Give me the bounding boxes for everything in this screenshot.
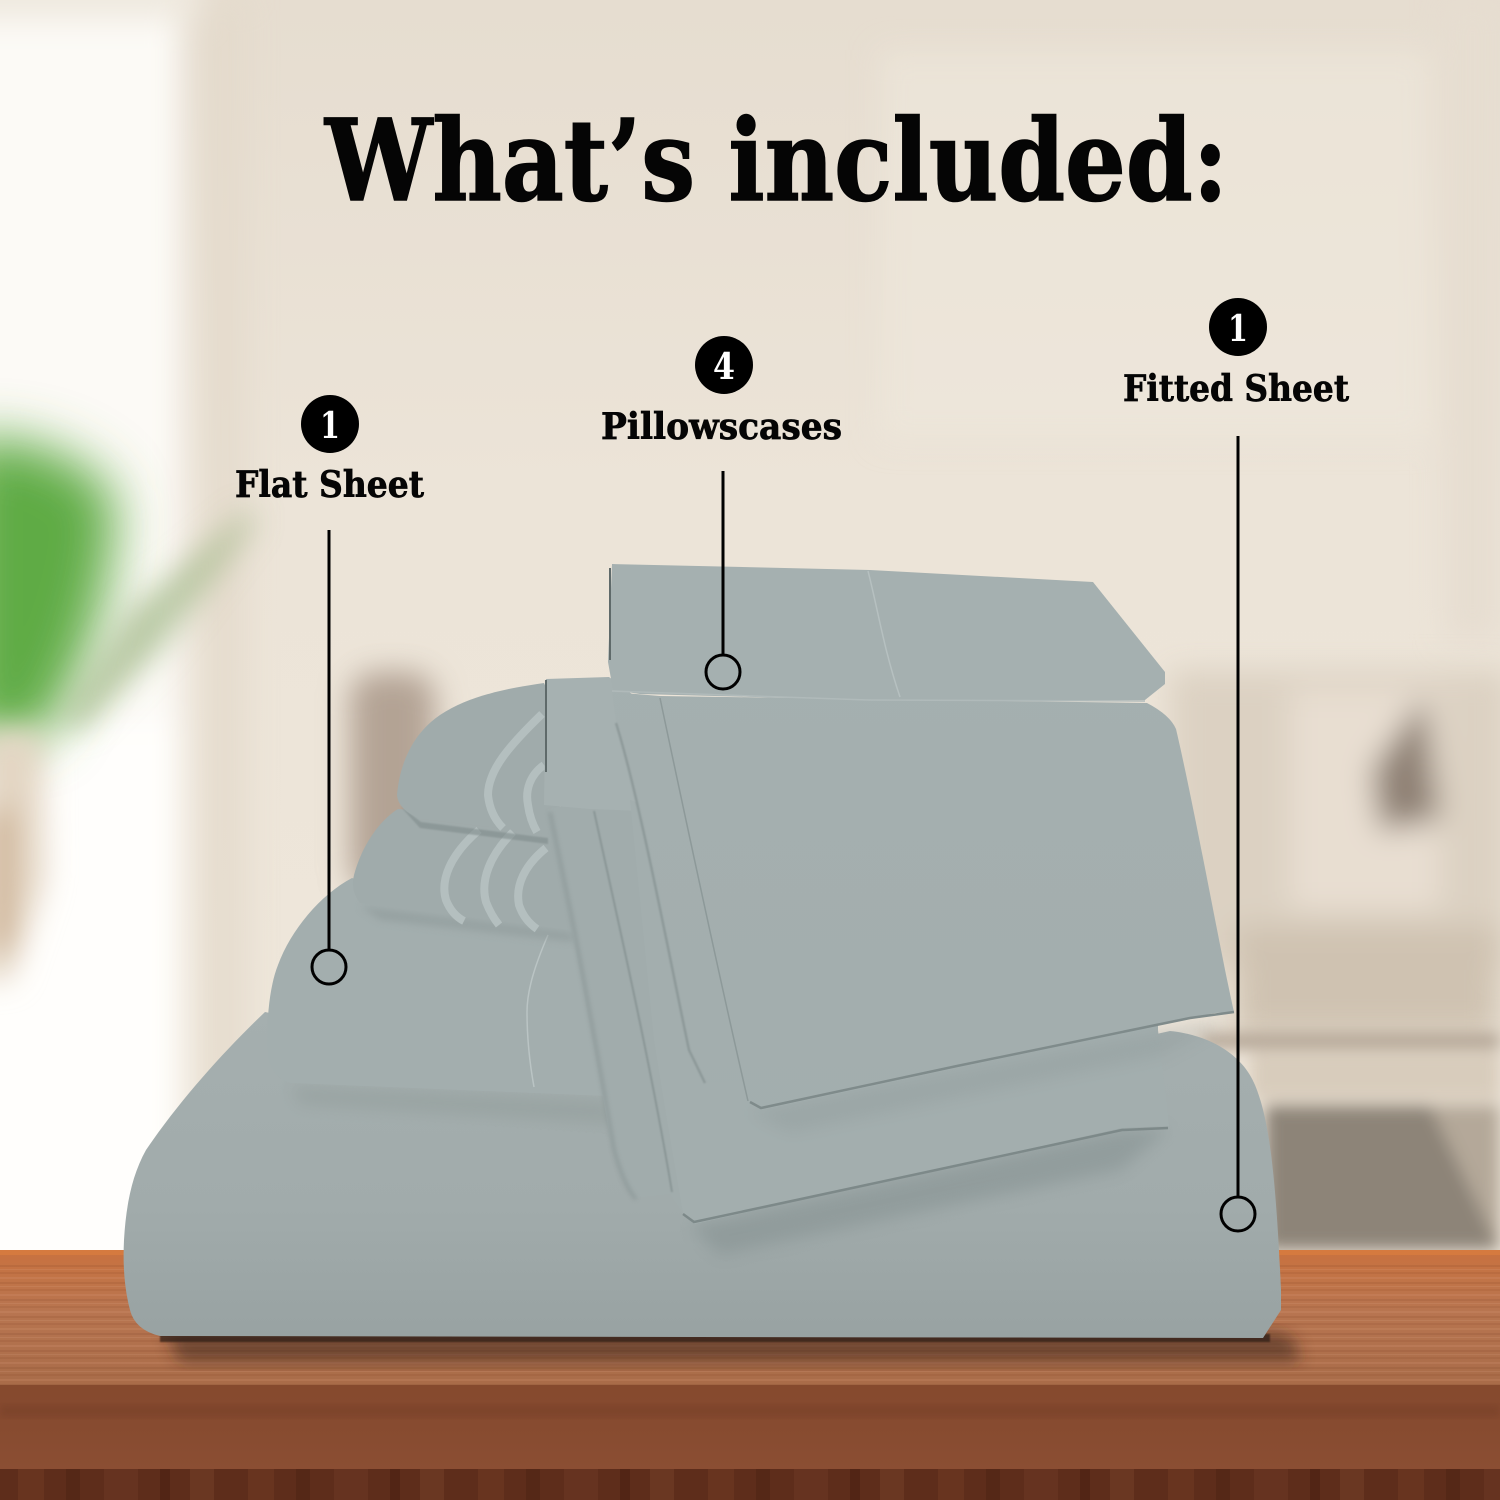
blurred sofa [350,670,1500,1035]
title: What’s included: [324,96,1228,227]
shadow under flat sheet [290,1086,620,1125]
badge: 1 fitted sheet: 1 [1228,308,1248,350]
upper pillowcase outer edge shadow [616,723,705,1083]
left strip outer shadow [550,812,636,1199]
flat sheet [267,878,640,1096]
badge: 4 pillowcases [695,336,753,394]
shadow of upper pillowcase on lower panel [750,1018,1230,1132]
stack of folded sheets [124,564,1281,1338]
fitted sheet [124,1012,1281,1338]
pointer: fitted sheet [1221,436,1255,1231]
side flap [544,677,640,811]
left strip fold [594,811,672,1192]
hanging pieces base [548,790,800,1224]
label: pillowcases: Pillowscases [601,406,842,448]
pointer: flat sheet [312,530,346,984]
badge: 4 pillowcases: 4 [713,346,735,388]
badge: 1 flat sheet: 1 [320,405,340,447]
lower pleats [444,830,546,929]
pleated pillowcase lower [353,809,600,930]
flat sheet stitch [527,935,548,1087]
shadow under upper pillowcase [400,806,548,844]
blurred plant [0,438,115,740]
callout: flat sheet [235,395,424,984]
callout: fitted sheet [1123,298,1349,1231]
pleated pillowcase upper [397,683,580,834]
badge: 1 flat sheet [301,395,359,453]
top folded pillowcase [608,564,1165,700]
badge: 1 fitted sheet [1209,298,1267,356]
callout: pillowcases [601,336,842,689]
upper pleats [488,714,544,832]
lower pillowcase panel [630,800,1169,1224]
label: flat sheet: Flat Sheet [235,464,424,506]
shadow under pleated pillowcase [360,906,575,942]
upper pillowcase [612,692,1234,1110]
pointer: pillowcases [706,471,740,689]
wooden table [0,1250,1500,1500]
shadow under lower pillowcase [690,1128,1170,1255]
label: fitted sheet: Fitted Sheet [1123,368,1349,410]
